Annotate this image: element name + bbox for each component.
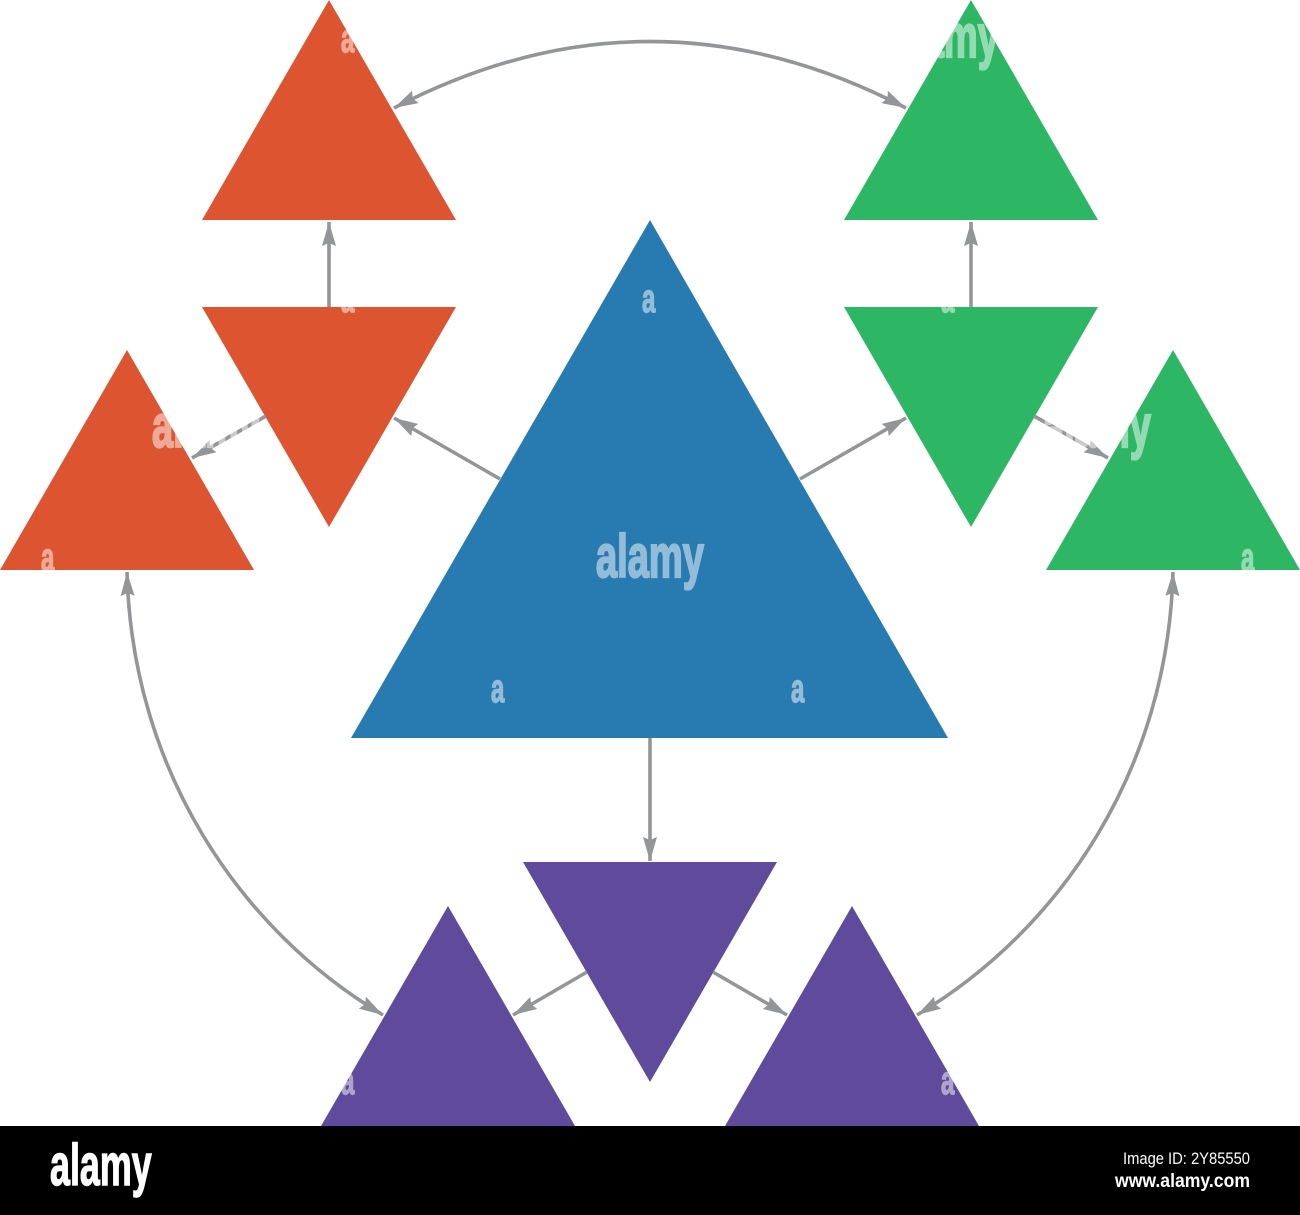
arrow: center to purple <box>648 738 652 861</box>
watermark: small marks: a <box>1241 535 1255 579</box>
watermark: small marks: a <box>41 535 55 579</box>
right triangle: green <box>1046 350 1300 570</box>
footer image id: Image ID: 2Y85550 <box>1123 1149 1250 1168</box>
arrow: green inverted to right green <box>1034 416 1108 458</box>
watermark: small marks: a <box>341 1058 355 1102</box>
arrow: center to red <box>394 418 500 479</box>
arrow: purple inverted to right purple <box>713 972 787 1015</box>
watermark: small marks: a <box>791 666 805 710</box>
footer logo: alamy <box>50 1133 152 1198</box>
watermark: small marks: a <box>642 276 656 320</box>
arrow: right arc green to purple <box>917 572 1173 1015</box>
watermark: center: alamy <box>596 523 704 590</box>
green group <box>844 0 1300 570</box>
footer bar <box>0 1126 1300 1215</box>
inverted triangle: green <box>844 307 1098 527</box>
arrows <box>127 42 1173 1015</box>
watermark: right: alamy <box>1043 393 1151 460</box>
right triangle: purple <box>725 906 979 1126</box>
watermark: small marks: a <box>941 1058 955 1102</box>
arrow: red inverted to left red <box>192 416 266 458</box>
arrow: red inverted to red top <box>327 222 331 307</box>
top triangle: green <box>844 0 1098 220</box>
watermark: left: alamy <box>152 393 260 460</box>
footer url: www.alamy.com <box>1114 1171 1250 1192</box>
purple group <box>321 862 979 1126</box>
center triangle: blue <box>351 220 948 738</box>
inverted triangle: purple <box>523 862 777 1082</box>
arrow: center to green <box>800 418 906 479</box>
arrow: top arc red to green <box>394 42 906 108</box>
watermark: small marks: a <box>341 276 355 320</box>
watermark: small marks: a <box>491 666 505 710</box>
arrow: green inverted to green top <box>969 222 973 307</box>
inverted triangle: red <box>202 307 456 527</box>
watermark: small marks: a <box>941 276 955 320</box>
watermark: top right: alamy <box>891 3 999 70</box>
arrow: purple inverted to left purple <box>513 972 587 1015</box>
red group <box>0 0 456 570</box>
left triangle: red <box>0 350 254 570</box>
left triangle: purple <box>321 906 575 1126</box>
arrow: left arc red to purple <box>127 572 383 1015</box>
top triangle: red <box>202 0 456 220</box>
watermark: small marks: a <box>341 16 355 60</box>
